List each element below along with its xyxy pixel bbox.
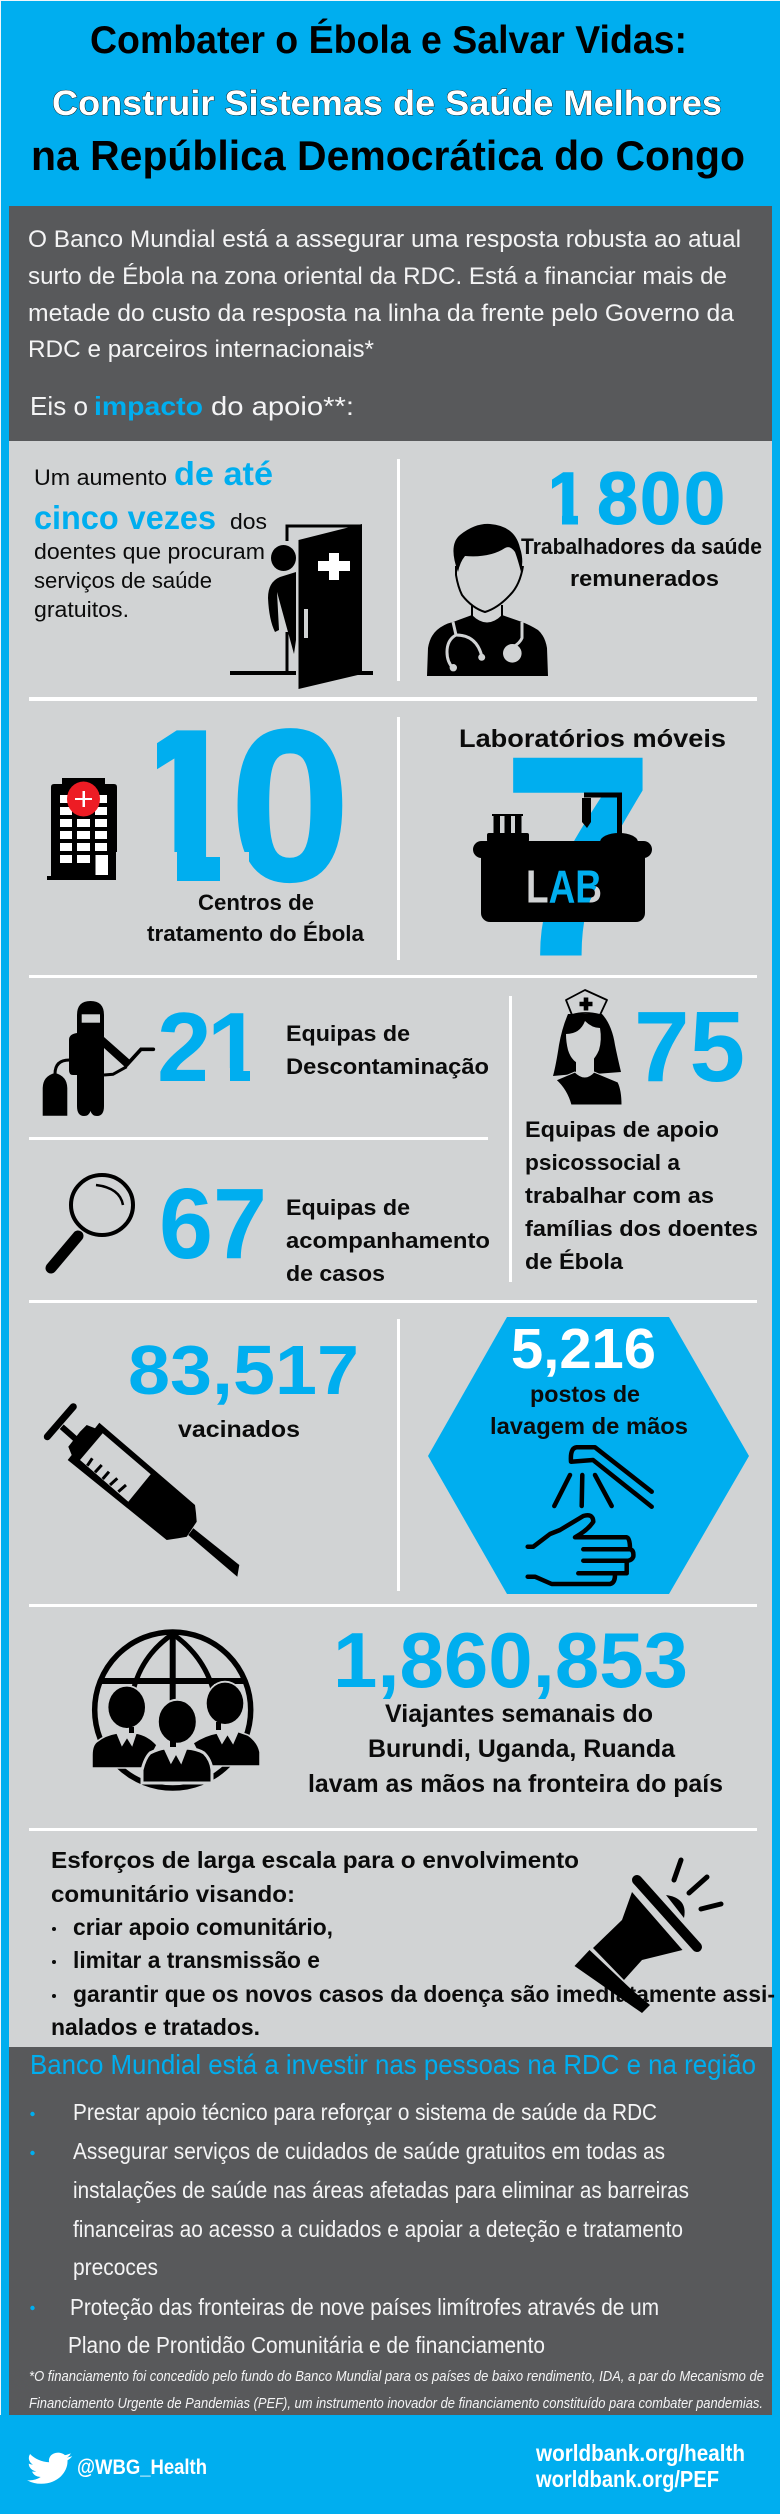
stat: 1800 health workers — [427, 457, 762, 676]
label: Laboratórios móveis — [459, 725, 726, 753]
website links: worldbank.org/health — [535, 2440, 745, 2466]
label — [147, 890, 365, 946]
label: Viajantes semanais do — [385, 1700, 653, 1728]
icon: decontamination worker — [43, 1001, 153, 1116]
label: Equipas de apoio — [525, 1117, 719, 1142]
icon: hand under running water — [528, 1447, 652, 1584]
icon: nurse — [553, 990, 622, 1105]
twitter handle: @WBG_Health — [77, 2456, 207, 2479]
stat: 1,860,853 travellers — [92, 1616, 723, 1798]
label: de Ébola — [525, 1249, 624, 1274]
label: lavam as mãos na fronteira do país — [308, 1770, 723, 1798]
label — [490, 1381, 688, 1439]
engagement text: limitar a transmissão e — [73, 1947, 320, 1973]
stat text: gratuitos. — [34, 597, 129, 622]
number: 67 — [159, 1168, 267, 1280]
label — [308, 1700, 723, 1798]
title line 3: na República Democrática do Congo — [31, 132, 745, 179]
label: famílias dos doentes — [525, 1216, 758, 1241]
number: 21 — [157, 992, 262, 1102]
label — [521, 534, 762, 591]
foot and flag mask for numeral — [116, 720, 249, 884]
label: Descontaminação — [286, 1054, 489, 1079]
impact heading — [30, 391, 354, 421]
stat text: cinco vezes — [34, 499, 216, 536]
label: trabalhar com as — [525, 1183, 714, 1208]
label: Trabalhadores da saúde — [521, 534, 762, 559]
label: Equipas de — [286, 1195, 410, 1220]
engagement text — [51, 1847, 775, 2040]
website links: worldbank.org/PEF — [535, 2466, 719, 2492]
label: remunerados — [570, 566, 719, 591]
stat: 7 mobile labs — [459, 698, 726, 1014]
label: Centros de — [198, 890, 314, 915]
stat text: de até — [174, 455, 273, 492]
intro paragraph: metade do custo da resposta na linha da frente pelo Governo da — [28, 300, 735, 327]
hexagon — [428, 1317, 749, 1594]
number: 75 — [634, 991, 745, 1103]
bullet list: Proteção das fronteiras de nove países limítrofes através de um — [70, 2294, 659, 2320]
bullet list: precoces — [73, 2254, 158, 2280]
title line 1: Combater o Ébola e Salvar Vidas: — [90, 18, 687, 62]
foot mask for numeral — [205, 1068, 268, 1083]
engagement text: nalados e tratados. — [51, 2014, 260, 2040]
engagement text: Esforços de larga escala para o envolvimento — [51, 1847, 579, 1873]
footnote — [29, 2368, 764, 2412]
icon: hospital building — [47, 778, 119, 880]
impact heading: impacto — [94, 391, 203, 421]
label: vacinados — [178, 1416, 300, 1442]
panel: impact — [9, 441, 772, 2047]
label: lavagem de mãos — [490, 1413, 688, 1439]
panel: World Bank investment — [9, 2047, 772, 2415]
label: tratamento do Ébola — [147, 921, 365, 946]
panel: introduction — [9, 206, 772, 441]
number: 1,860,853 — [333, 1616, 688, 1704]
engagement text: comunitário visando: — [51, 1881, 295, 1907]
impact heading: do apoio**: — [211, 391, 354, 421]
icon: laboratory kit — [473, 795, 652, 922]
bullet list: Plano de Prontidão Comunitária e de financiamento — [68, 2332, 545, 2358]
label — [286, 1195, 490, 1286]
label: psicossocial a — [525, 1150, 681, 1175]
label: Burundi, Uganda, Ruanda — [368, 1735, 676, 1763]
stat: 21 decontamination teams — [43, 992, 489, 1116]
stat: 5,216 handwashing stations — [428, 1317, 749, 1594]
impact heading: Eis o — [30, 391, 88, 421]
icon: person at clinic door — [230, 524, 373, 689]
bullet list — [30, 2099, 689, 2358]
icon: twitter bird — [27, 2453, 72, 2484]
label — [286, 1021, 489, 1079]
bullet list: financeiras ao acesso a cuidados e apoiar a deteção e tratamento — [73, 2216, 683, 2242]
intro paragraph: surto de Ébola na zona oriental da RDC. Está a financiar mais de — [28, 263, 727, 290]
intro paragraph: RDC e parceiros internacionais* — [28, 336, 374, 363]
bullet list: Assegurar serviços de cuidados de saúde gratuitos em todas as — [73, 2138, 665, 2164]
stat: 67 case tracking teams — [51, 1168, 490, 1286]
number: 1 800 — [546, 457, 725, 540]
title line 2: Construir Sistemas de Saúde Melhores — [52, 84, 722, 123]
community engagement block — [51, 1847, 775, 2040]
icon: magnifying glass — [51, 1175, 133, 1268]
stat text: Um aumento — [34, 465, 167, 490]
footer — [27, 2440, 745, 2492]
stat: 10 treatment centres — [47, 684, 365, 946]
bullet list: instalações de saúde nas áreas afetadas para eliminar as barreiras — [73, 2177, 689, 2203]
intro paragraph: O Banco Mundial está a assegurar uma resposta robusta ao atual — [28, 226, 741, 253]
icon: doctor — [427, 524, 548, 676]
number: 83,517 — [128, 1331, 359, 1409]
number: 5,216 — [511, 1317, 656, 1381]
icon: syringe — [47, 1407, 239, 1577]
intro paragraph — [28, 226, 741, 363]
stat: 75 psychosocial teams — [525, 990, 758, 1274]
label: acompanhamento — [286, 1228, 490, 1253]
engagement text: garantir que os novos casos da doença são imediatamente assi- — [73, 1981, 775, 2007]
stat: 83,517 vaccinated — [47, 1331, 359, 1577]
icon: laboratory kit: LAB — [526, 860, 602, 912]
label: de casos — [286, 1261, 385, 1286]
foot mask for numeral — [543, 470, 594, 527]
label: postos de — [530, 1381, 640, 1407]
dividers — [29, 459, 757, 1831]
stat text — [34, 455, 273, 622]
number: 10 — [125, 684, 350, 926]
stat text: serviços de saúde — [34, 568, 212, 593]
label — [525, 1117, 758, 1274]
bullet list: Prestar apoio técnico para reforçar o sistema de saúde da RDC — [73, 2099, 657, 2125]
stat text: dos — [230, 509, 267, 534]
title — [31, 18, 745, 179]
stat: five times more patients — [34, 455, 373, 689]
stat text: doentes que procuram — [34, 539, 265, 564]
icon: megaphone — [574, 1860, 721, 2013]
number: 7 — [503, 698, 653, 1014]
website links — [535, 2440, 745, 2492]
icon: people and globe — [92, 1632, 260, 1788]
engagement text: criar apoio comunitário, — [73, 1914, 333, 1940]
label: Equipas de — [286, 1021, 410, 1046]
